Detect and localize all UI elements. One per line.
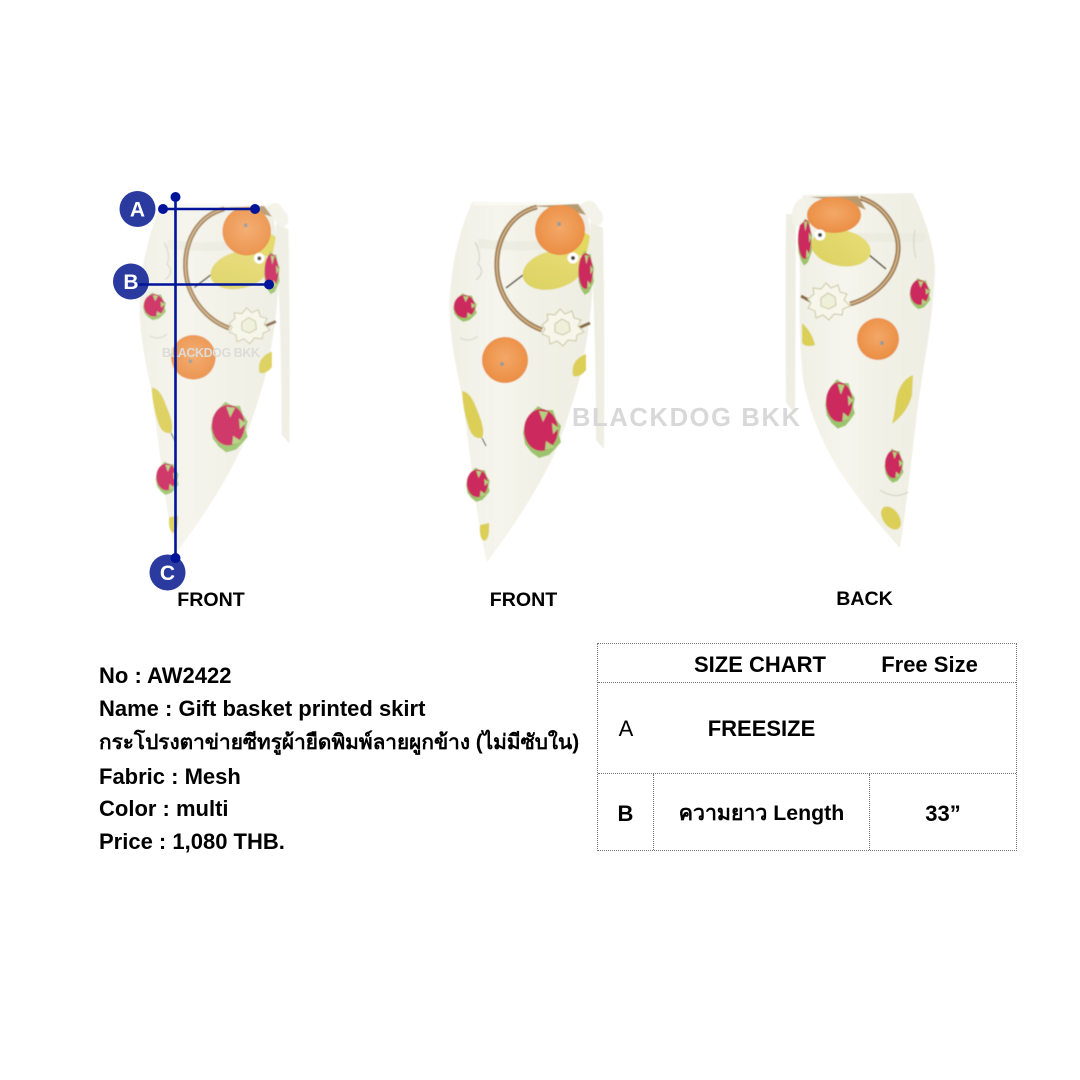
column divider 2: [869, 774, 870, 850]
caption: front 1: FRONT: [177, 589, 245, 611]
product details: [99, 663, 579, 854]
watermark: BLACKDOG BKK: [572, 404, 801, 432]
marker C: [150, 554, 186, 590]
measurement lines: [138, 192, 274, 563]
row B label: B: [618, 801, 633, 826]
color: Color : multi: [99, 796, 229, 821]
row A label: A: [619, 716, 633, 741]
product number: No : AW2422: [99, 663, 231, 688]
row B name: ความยาว Length: [679, 801, 844, 825]
row A value: FREESIZE: [708, 716, 815, 741]
Thai description: กระโปรงตาข่ายซีทรูผ้ายืดพิมพ์ลายผูกข้าง (ไม่มีซับใน): [99, 731, 579, 754]
row divider 1: [598, 682, 1016, 683]
row divider 2: [598, 773, 1016, 774]
back knot: [792, 198, 807, 226]
fabric: Fabric : Mesh: [99, 764, 241, 789]
skirt: back: [786, 193, 935, 548]
marker A: A: [130, 198, 145, 222]
size chart table: [597, 643, 1017, 851]
marker B: [113, 264, 149, 300]
header: free size: Free Size: [881, 652, 978, 677]
caption: front 2: FRONT: [490, 589, 557, 611]
price: Price : 1,080 THB.: [99, 829, 285, 854]
product name: Name : Gift basket printed skirt: [99, 696, 425, 721]
skirt: front with measurements: [140, 203, 290, 553]
caption: back: BACK: [836, 588, 893, 610]
marker B: B: [123, 271, 139, 294]
back tie: [786, 214, 796, 415]
marker C: C: [160, 562, 175, 585]
row B value: 33”: [925, 801, 961, 826]
skirt: front: [450, 201, 604, 562]
marker A: [120, 191, 156, 227]
watermark: small: BLACKDOG BKK: [162, 346, 260, 360]
illustration: skirts: [113, 191, 936, 590]
column divider 1: [653, 774, 654, 850]
header: size chart: SIZE CHART: [694, 652, 826, 677]
